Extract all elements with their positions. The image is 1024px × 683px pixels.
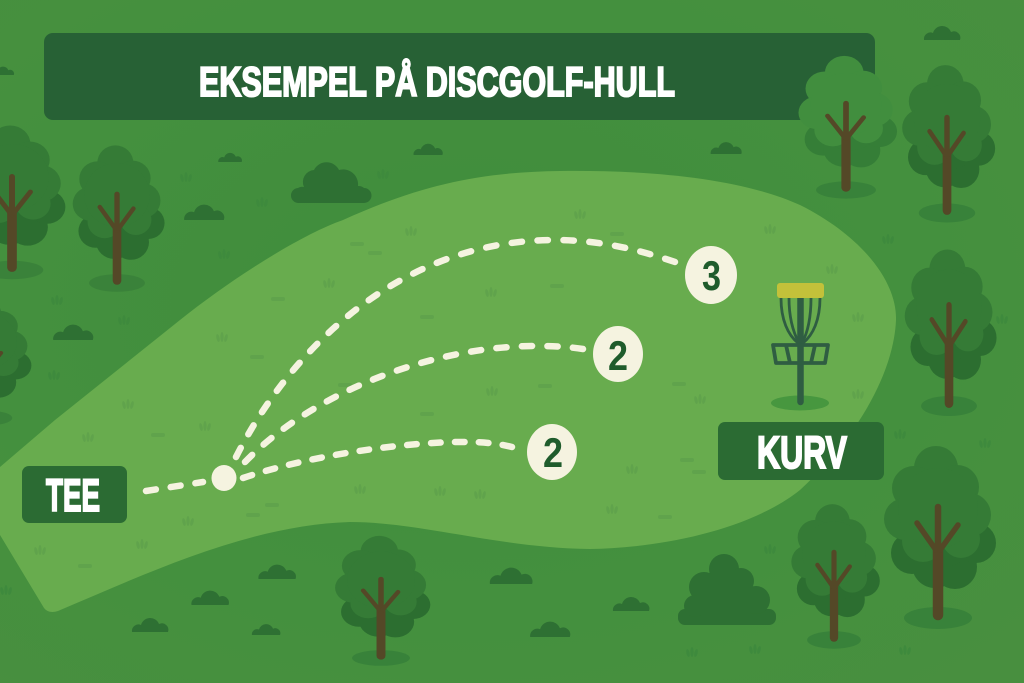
large bush bottom xyxy=(678,554,776,625)
fairway xyxy=(0,171,896,612)
tree bottom centre xyxy=(335,536,430,666)
tree left edge lower xyxy=(0,298,31,426)
score marker 2 upper xyxy=(593,326,643,382)
title banner xyxy=(44,33,875,120)
title banner: EKSEMPEL PÅ DISCGOLF-HULL xyxy=(199,58,675,105)
tree left edge upper xyxy=(0,126,65,279)
flight path: throw 2 upper xyxy=(245,346,583,462)
large bush top xyxy=(291,162,372,203)
score marker 2 lower: 2 xyxy=(543,429,563,476)
score marker 3: 3 xyxy=(702,252,721,299)
label: TEE xyxy=(22,466,127,523)
label: KURV xyxy=(718,422,884,480)
tree bottom right small xyxy=(791,504,880,649)
score marker 2 upper: 2 xyxy=(608,332,628,379)
tree top right one xyxy=(798,56,897,199)
flight path: throw 2 lower xyxy=(243,442,512,478)
label: TEE: TEE xyxy=(46,470,100,521)
tree right middle xyxy=(905,249,997,416)
flight path: lead from tee xyxy=(146,482,203,491)
icon: disc golf basket xyxy=(771,283,829,410)
flight path: throw 3 xyxy=(236,240,675,457)
score marker 2 lower xyxy=(527,424,577,480)
grass tufts on meadow xyxy=(0,169,1009,657)
grass tufts on fairway xyxy=(34,209,865,568)
disc xyxy=(212,465,236,491)
score marker 3 xyxy=(685,246,737,304)
tree top right two xyxy=(902,65,995,222)
label: KURV: KURV xyxy=(757,427,847,478)
tree right bottom xyxy=(884,446,996,629)
tree left second xyxy=(73,145,165,292)
